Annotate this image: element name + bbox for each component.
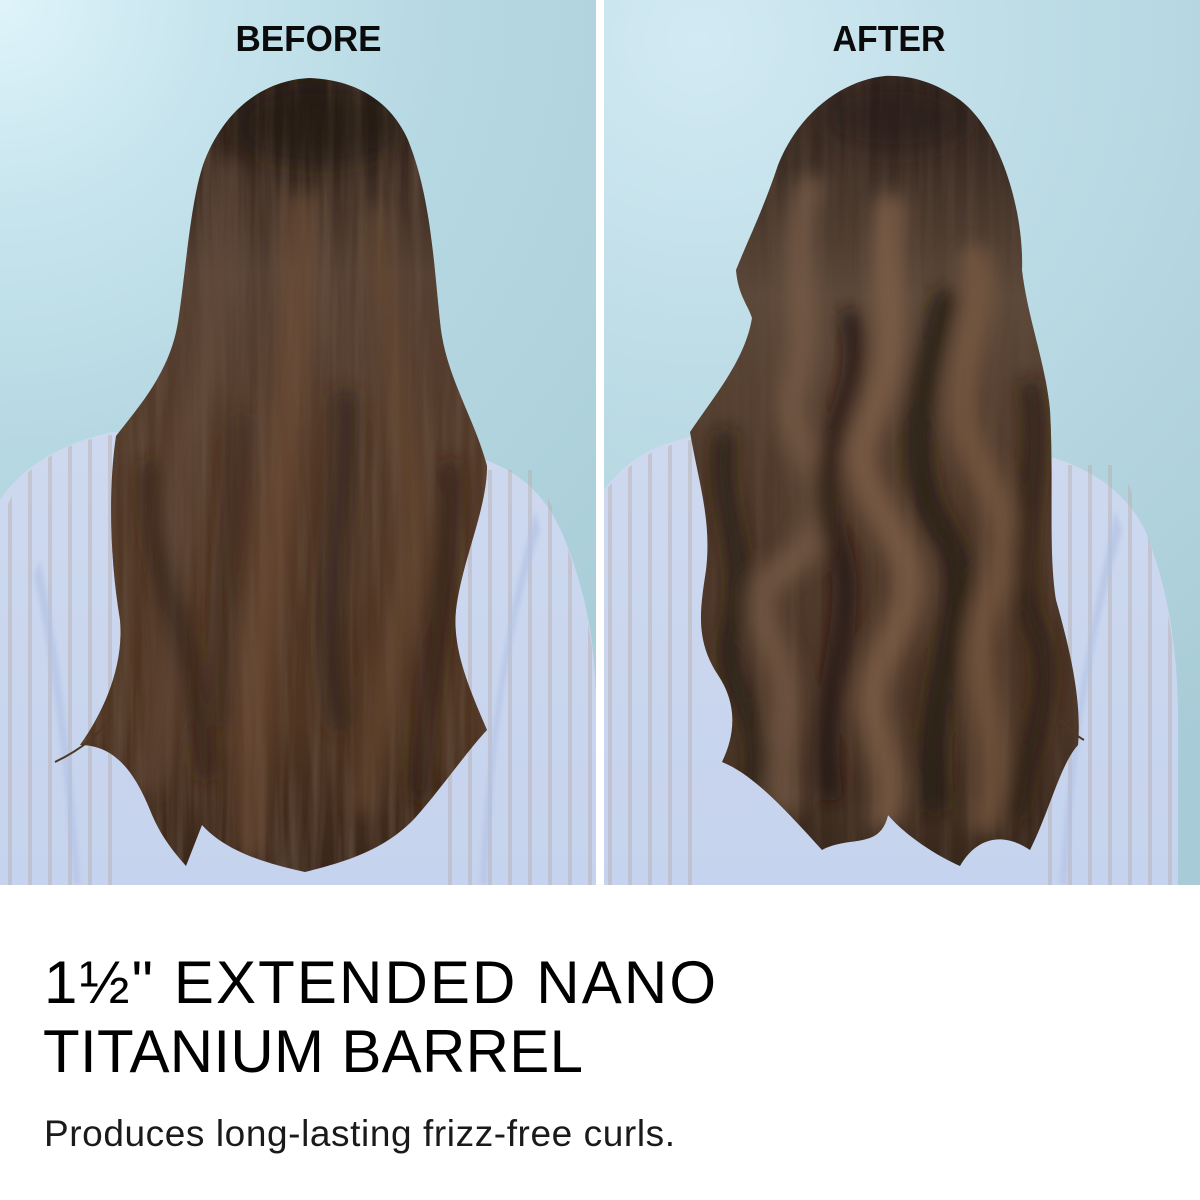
subtitle: Produces long-lasting frizz-free curls. (44, 1113, 675, 1154)
hair: after (680, 70, 1090, 880)
hair: before (60, 70, 500, 880)
stray hair strand: after (1060, 720, 1084, 740)
panel: before photo (0, 0, 596, 885)
heading: before label: BEFORE (236, 18, 382, 59)
stray hair strand: before (54, 730, 100, 763)
title: 1½" EXTENDED NANO (44, 949, 716, 1016)
sweater: after (604, 436, 1178, 885)
heading: after label: AFTER (832, 18, 946, 59)
panel: after photo (604, 0, 1200, 885)
title: TITANIUM BARREL (43, 1018, 583, 1085)
title (43, 949, 716, 1085)
sweater: before (0, 432, 596, 885)
